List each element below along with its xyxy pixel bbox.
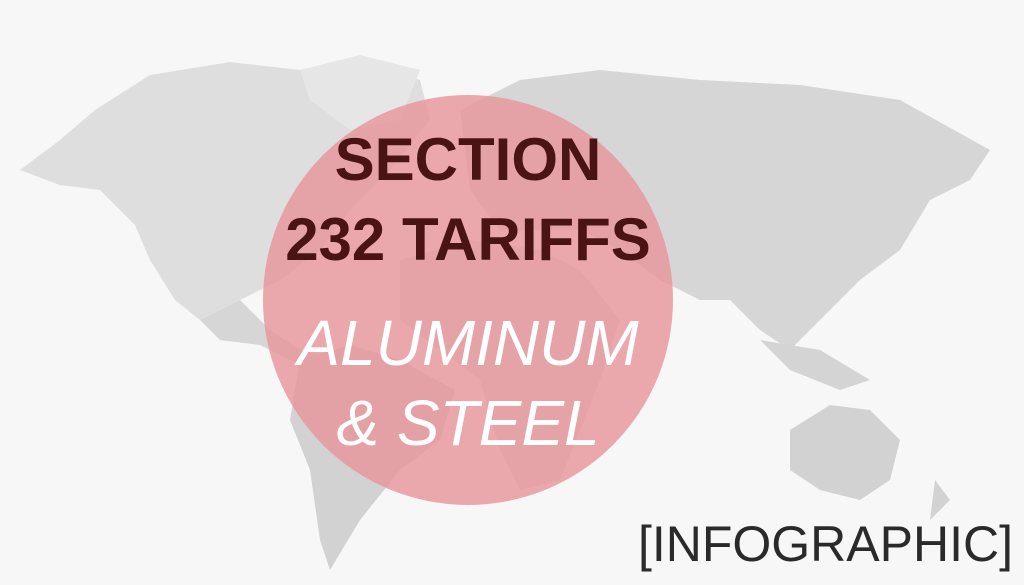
Europe/Asia <box>460 70 990 350</box>
Africa <box>400 240 620 490</box>
label: INFOGRAPHIC: [INFOGRAPHIC] <box>638 516 1013 572</box>
Central America <box>200 300 320 365</box>
Australia <box>790 405 900 500</box>
subtitle: ALUMINUM: ALUMINUM <box>297 307 639 379</box>
Greenland <box>300 55 420 130</box>
title: SECTION: SECTION <box>335 126 601 193</box>
North America <box>20 60 430 320</box>
pink circle <box>263 95 673 505</box>
South America <box>290 345 455 570</box>
subtitle: & STEEL: & STEEL <box>336 387 600 459</box>
title: 232 TARIFFS: 232 TARIFFS <box>285 206 651 273</box>
Southeast Asia islands <box>760 340 870 390</box>
